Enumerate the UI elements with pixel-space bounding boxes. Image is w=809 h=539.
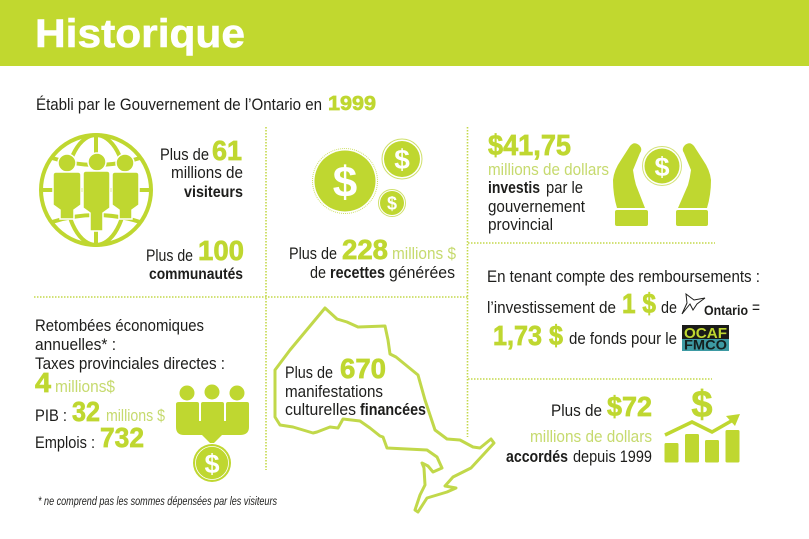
statistic: 61 million visitors: Plus de (160, 146, 209, 164)
panel: reimbursement return: de fonds pour le (569, 330, 677, 348)
icon: coins: $ (333, 158, 357, 207)
panel: reimbursement return: l’investissement de (487, 299, 616, 317)
statistic: 670 cultural events: manifestations (285, 383, 383, 401)
statistic: 670 cultural events: 670 (340, 353, 386, 384)
statistic: 41,75 million invested (488, 130, 609, 234)
statistic: 72 million granted: depuis 1999 (573, 448, 652, 466)
intro text: Établi par le Gouvernement de l’Ontario en (36, 95, 322, 114)
icon: OCAF FMCO logo (682, 325, 729, 352)
icon: hands holding coin: $ (654, 152, 670, 182)
statistic: 670 cultural events: financées (360, 401, 426, 419)
intro text: 1999 (328, 93, 376, 115)
statistic: 228 million revenue: générées (389, 264, 455, 282)
panel: economic impact: Retombées économiques (35, 317, 204, 335)
statistic: 670 cultural events (285, 353, 426, 419)
panel: reimbursement return: de (661, 299, 677, 317)
statistic: 41,75 million invested: investis (488, 179, 540, 197)
panel: economic impact: 4 (35, 367, 51, 398)
panel: reimbursement return (487, 268, 760, 352)
statistic: 228 million revenue: de (310, 264, 326, 282)
statistic: 72 million granted: millions de dollars (530, 428, 652, 446)
panel: economic impact: PIB : (35, 407, 67, 425)
statistic: 228 million revenue: recettes (330, 264, 385, 282)
statistic: 228 million revenue: 228 (342, 234, 388, 265)
icon: rising bar chart with dollar (664, 384, 740, 462)
icon: people with coin: $ (204, 449, 220, 479)
statistic: 100 communities: Plus de (146, 247, 193, 265)
statistic: 228 million revenue: Plus de (289, 245, 337, 263)
statistic: 670 cultural events: culturelles (285, 401, 356, 419)
panel: economic impact: annuelles* : (35, 336, 116, 354)
panel: economic impact: 32 (72, 396, 100, 427)
statistic: 228 million revenue (289, 234, 456, 282)
title: Historique (35, 12, 245, 56)
panel: revenue (289, 139, 456, 282)
statistic: 72 million granted: Plus de (551, 402, 602, 420)
icon: Ontario logo (682, 294, 748, 318)
statistic: 72 million granted (506, 391, 652, 466)
icon: coins: $ (387, 194, 397, 214)
statistic: 41,75 million invested: gouvernement (488, 198, 585, 216)
panel: reimbursement return: 1,73 $ (493, 320, 563, 351)
panel: economic impact: 732 (100, 422, 144, 453)
icon: coins (312, 139, 422, 216)
panel: visitors and communities (41, 135, 244, 283)
icon: coins: $ (394, 144, 410, 175)
icon: globe with people (41, 135, 151, 245)
statistic: 41,75 million invested: millions de dollars (488, 161, 609, 179)
statistic: 72 million granted: accordés (506, 448, 568, 466)
footnote: * ne comprend pas les sommes dépensées par les visiteurs (38, 496, 277, 508)
statistic: 61 million visitors: visiteurs (184, 184, 243, 201)
panel: 72 million granted (506, 384, 740, 466)
statistic: 670 cultural events: Plus de (285, 364, 333, 382)
panel: economic impact: Emplois : (35, 434, 95, 452)
panel: provincial investment (488, 130, 711, 234)
panel: reimbursement return: = (752, 299, 760, 317)
map: Ontario outline (275, 308, 494, 512)
panel: economic impact (35, 317, 277, 508)
panel: economic impact: millions$ (55, 378, 115, 396)
icon: hands holding coin (613, 143, 711, 226)
panel: cultural events map (275, 308, 494, 512)
panel: economic impact: Taxes provinciales directes : (35, 355, 225, 373)
statistic: 41,75 million invested: par le (546, 179, 583, 197)
statistic: 100 communities: communautés (149, 266, 243, 283)
statistic: 41,75 million invested: provincial (488, 216, 553, 234)
panel: reimbursement return: En tenant compte des remboursements : (487, 268, 760, 286)
panel: reimbursement return: 1 $ (622, 288, 656, 319)
statistic: 41,75 million invested: $41,75 (488, 130, 571, 162)
icon: rising bar chart with dollar: $ (691, 384, 713, 426)
statistic: 100 communities: 100 (198, 235, 244, 266)
panel: economic impact: millions $ (106, 407, 165, 425)
statistic: 100 communities (146, 235, 244, 283)
icon: OCAF FMCO logo: OCAF (684, 325, 727, 342)
icon: Ontario logo: Ontario (704, 302, 748, 318)
statistic: 61 million visitors: 61 (212, 135, 242, 166)
statistic: 72 million granted: $72 (607, 391, 652, 422)
icon: people with coin (176, 384, 249, 482)
statistic: 61 million visitors: millions de (171, 164, 243, 182)
icon: OCAF FMCO logo: FMCO (684, 336, 727, 352)
header banner (0, 0, 809, 66)
statistic: 228 million revenue: millions $ (392, 245, 456, 263)
statistic: 61 million visitors (160, 135, 243, 201)
